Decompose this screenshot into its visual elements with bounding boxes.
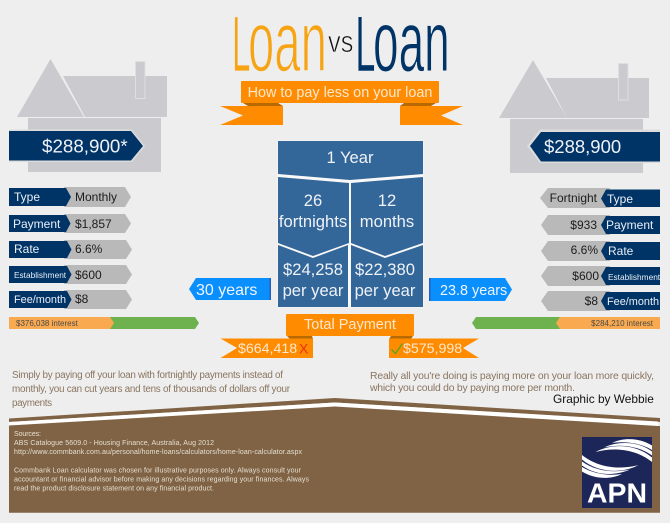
left loan amount badge: $288,900* bbox=[42, 136, 128, 156]
23.8 years arrow bbox=[429, 278, 512, 301]
right row: rate: 6.6% bbox=[571, 243, 598, 257]
right row: establishment: Establishment bbox=[608, 272, 661, 282]
right row: establishment bbox=[541, 266, 661, 286]
subtitle ribbon bbox=[220, 81, 463, 125]
left row: payment: $1,857 bbox=[75, 217, 112, 231]
total payment ribbon: Total Payment bbox=[304, 317, 396, 333]
left row: establishment: Establishment bbox=[14, 270, 67, 280]
right row: type bbox=[540, 188, 660, 208]
right commentary: which you could do by paying more per month. bbox=[369, 383, 575, 394]
right row: fee per month bbox=[541, 291, 660, 311]
title: L bbox=[356, 0, 375, 88]
30 years arrow: 30 years bbox=[196, 282, 257, 299]
icon: right house bbox=[499, 60, 649, 173]
left row: payment bbox=[9, 214, 131, 233]
left row: fee per month bbox=[9, 290, 132, 309]
right row: type: Fortnight bbox=[550, 191, 598, 205]
left row: type bbox=[9, 187, 131, 207]
left row: payment: Payment bbox=[13, 217, 61, 231]
left loan amount badge bbox=[9, 130, 145, 162]
footer panel bbox=[9, 398, 660, 513]
left row: fee per month: $8 bbox=[75, 292, 89, 306]
subtitle ribbon: How to pay less on your loan bbox=[248, 85, 432, 101]
panel: 1 year comparison: $24,258 bbox=[283, 260, 343, 279]
left row: rate: Rate bbox=[14, 242, 40, 256]
left commentary: Simply by paying off your loan with fortnightly payments instead of bbox=[12, 370, 283, 381]
icon: green tick bbox=[392, 344, 402, 354]
credit: Graphic by Webbie bbox=[553, 392, 654, 406]
left row: type: Type bbox=[14, 190, 40, 204]
panel: 1 year comparison: 26 bbox=[304, 191, 322, 210]
icon: left house bbox=[17, 59, 167, 172]
panel: 1 year comparison: 1 Year bbox=[326, 148, 374, 167]
left row: rate bbox=[9, 240, 132, 259]
sources text: Commbank Loan calculator was chosen for illustrative purposes only. Always consult your bbox=[14, 468, 302, 475]
right interest bar: $284,210 interest bbox=[591, 319, 654, 328]
right row: fee per month: $8 bbox=[585, 294, 598, 308]
left row: fee per month: Fee/month bbox=[14, 294, 66, 306]
right commentary bbox=[369, 371, 654, 394]
30 years arrow bbox=[189, 278, 271, 300]
sources text: read the product disclosure statement on any financial product. bbox=[14, 486, 214, 493]
left row: establishment bbox=[9, 265, 132, 284]
right row: establishment: $600 bbox=[572, 269, 599, 283]
panel: 1 year comparison: $22,380 bbox=[355, 260, 415, 279]
right row: rate: Rate bbox=[608, 244, 634, 258]
panel: 1 year comparison bbox=[278, 140, 424, 308]
left row: rate: 6.6% bbox=[75, 242, 103, 256]
sources text bbox=[14, 431, 310, 493]
total payment ribbon bbox=[286, 314, 414, 339]
right row: payment: $933 bbox=[570, 218, 597, 232]
sources text: http://www.commbank.com.au/personal/home-loans/calculators/home-loan-calculator.aspx bbox=[14, 449, 302, 456]
right total: $575,998: $575,998 bbox=[403, 341, 462, 357]
panel: 1 year comparison: 12 bbox=[378, 191, 396, 210]
right row: fee per month: Fee/month bbox=[607, 296, 659, 308]
sources text: ABS Catalogue 5609.0 - Housing Finance, Australia, Aug 2012 bbox=[14, 440, 214, 447]
left interest bar bbox=[9, 317, 199, 329]
right row: payment: Payment bbox=[606, 218, 654, 232]
right row: rate bbox=[541, 241, 660, 261]
23.8 years arrow: 23.8 years bbox=[440, 283, 507, 299]
panel: 1 year comparison: per year bbox=[283, 281, 344, 300]
left row: type: Monthly bbox=[75, 190, 117, 204]
left row: establishment: $600 bbox=[75, 268, 102, 282]
right row: type: Type bbox=[607, 192, 633, 206]
left commentary: monthly, you can cut years and tens of thousands of dollars off your bbox=[12, 384, 291, 395]
left total: $664,418: $664,418 bbox=[238, 341, 297, 357]
logo: APN bbox=[582, 437, 652, 508]
left interest bar: $376,038 interest bbox=[16, 319, 79, 328]
sources text: Sources: bbox=[14, 431, 41, 438]
left commentary bbox=[12, 370, 291, 409]
title: vs bbox=[328, 25, 353, 60]
right total: $575,998 bbox=[389, 338, 479, 358]
logo: APN: APN bbox=[587, 478, 647, 508]
title bbox=[232, 0, 450, 90]
sources text: accountant or financial advisor before making any decisions regarding your finances. Always bbox=[14, 477, 310, 484]
left total: $664,418 bbox=[220, 338, 313, 358]
panel: 1 year comparison: per year bbox=[355, 281, 416, 300]
panel: 1 year comparison: months bbox=[360, 212, 414, 231]
right loan amount badge bbox=[527, 130, 660, 163]
title: L bbox=[232, 0, 250, 88]
panel: 1 year comparison: fortnights bbox=[279, 212, 347, 231]
right row: payment bbox=[541, 215, 660, 235]
right interest bar bbox=[472, 317, 660, 329]
right loan amount badge: $288,900 bbox=[544, 136, 621, 157]
icon: red cross: X bbox=[299, 340, 309, 356]
left commentary: payments bbox=[12, 398, 52, 409]
right commentary: Really all you're doing is paying more on your loan more quickly, bbox=[370, 371, 654, 382]
